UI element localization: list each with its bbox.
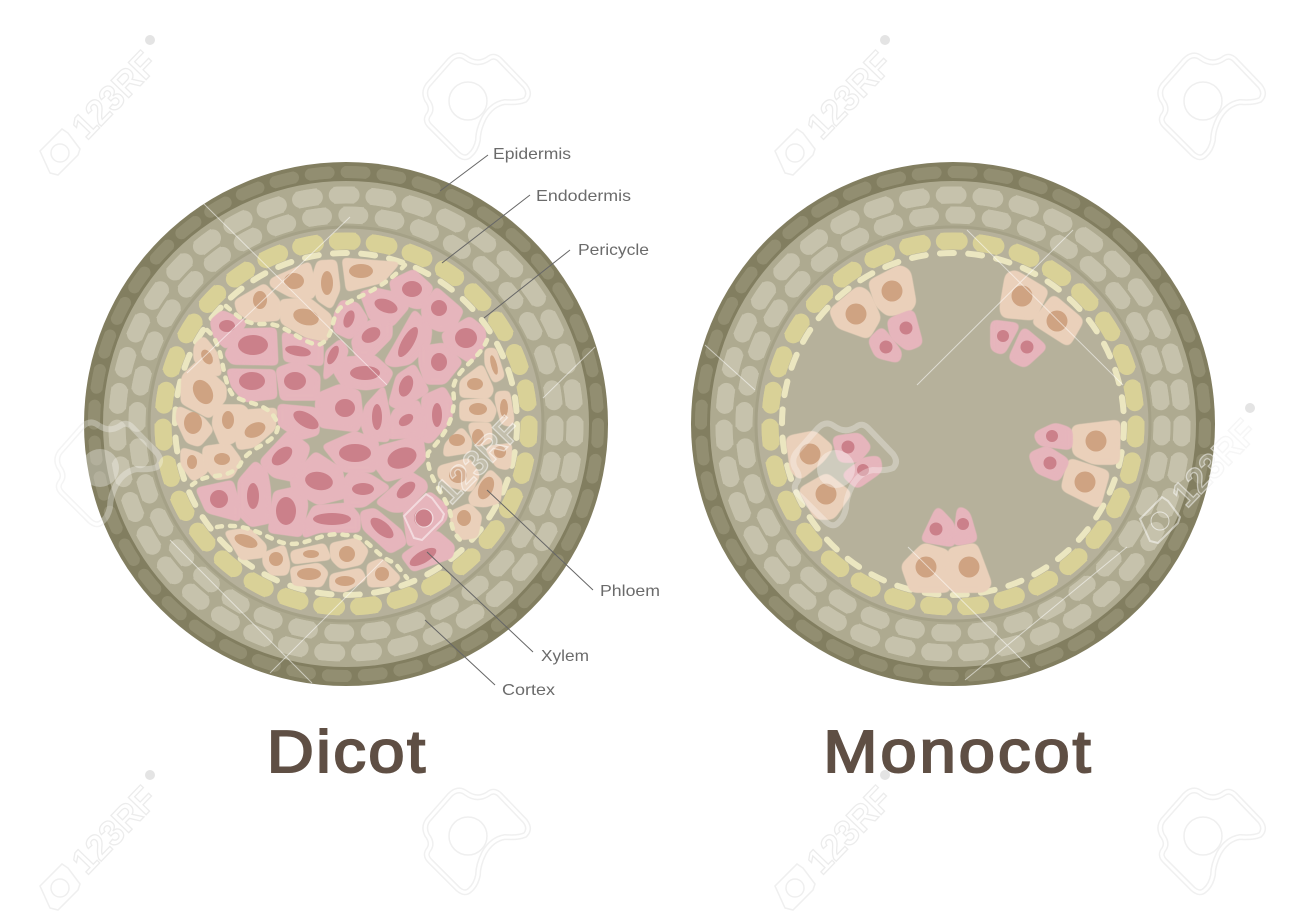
panel: dicot root (84, 162, 608, 686)
title: Dicot: Dicot (267, 720, 425, 785)
vascular bundle: top right (990, 269, 1085, 369)
cortex ring (103, 181, 589, 667)
label: Phloem: Phloem (600, 583, 660, 600)
vascular bundle: right (1027, 419, 1121, 510)
endodermis ring (163, 241, 529, 607)
label: Phloem (487, 490, 660, 600)
watermark: 123RF logos: 123RF (798, 778, 900, 882)
watermark: 123RF logos: 123RF (63, 778, 165, 882)
label: Epidermis (440, 146, 571, 191)
watermark: 123RF overlays on the diagrams: 123RF (1163, 411, 1265, 515)
label: Pericycle (484, 242, 649, 318)
label: Endodermis: Endodermis (536, 188, 631, 205)
label: Epidermis: Epidermis (493, 146, 571, 163)
dashed boundary around xylem (192, 265, 487, 578)
watermark: 123RF overlays on the diagrams (404, 408, 1265, 543)
pericycle ring (782, 253, 1124, 595)
label: Endodermis (442, 188, 631, 263)
panel: monocot root (691, 162, 1215, 686)
vascular bundle: top left (828, 264, 924, 364)
watermark: 123RF logos: 123RF (63, 43, 165, 147)
label: Xylem (427, 552, 589, 665)
watermark: stamp overlays on the diagrams (57, 422, 896, 525)
label: Pericycle: Pericycle (578, 242, 649, 259)
label: Cortex: Cortex (502, 682, 555, 699)
pericycle ring (175, 253, 517, 595)
endodermis ring (770, 241, 1136, 607)
vascular bundle: left (785, 430, 883, 520)
watermark: 123RF logos: 123RF (1163, 411, 1265, 515)
label: Cortex (425, 620, 555, 699)
epidermis ring (691, 162, 1215, 686)
xylem cells (193, 267, 488, 574)
cortex ring (710, 181, 1196, 667)
watermark: 123RF logos: 123RF (798, 43, 900, 147)
watermark: thin diagonal scratches (170, 203, 1127, 683)
epidermis ring (84, 162, 608, 686)
title: Monocot: Monocot (823, 720, 1091, 785)
watermark: 123RF overlays on the diagrams: 123RF (427, 408, 529, 512)
label: Xylem: Xylem (541, 648, 589, 665)
vascular bundle: bottom (900, 504, 993, 593)
phloem cells (174, 256, 516, 594)
